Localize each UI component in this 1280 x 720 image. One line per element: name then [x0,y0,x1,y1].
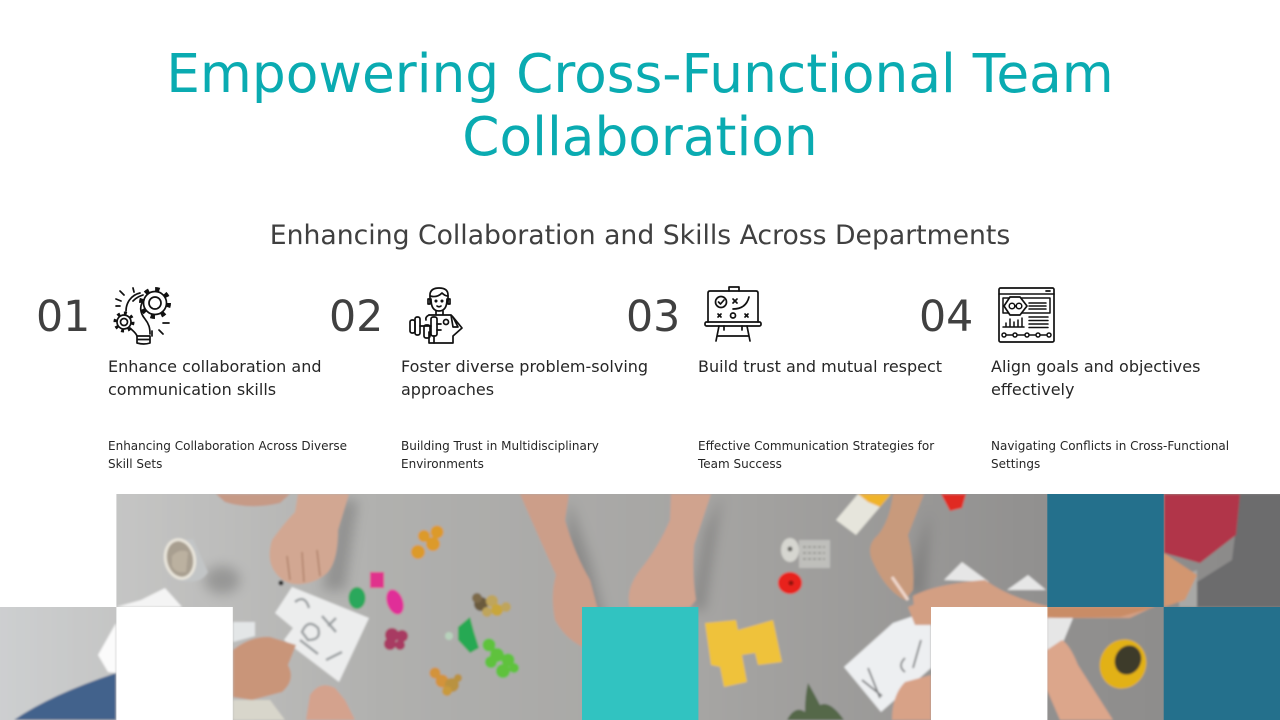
step 01 heading: communication skills [108,380,276,399]
icon: analytics dashboard window [998,287,1055,343]
step 03 description [698,439,934,471]
blocks: lower orange [430,668,462,696]
top-left hand [270,494,349,584]
step 02 heading [401,357,648,399]
photo content [0,484,1280,720]
bottom-left: notebook and sleeve [116,588,182,607]
step 03 heading: Build trust and mutual respect [698,357,942,376]
yellow card [705,620,782,687]
shadows [204,494,930,640]
step 01 description: Enhancing Collaboration Across Diverse [108,439,347,453]
horizontal arm [913,580,1155,625]
step 02 number: 02 [329,292,383,342]
step 02 description: Environments [401,457,484,471]
right arm and hand [870,494,924,600]
icon: lightbulb with gears [114,287,171,345]
step 02 heading: approaches [401,380,494,399]
stationery top right [836,494,891,535]
step 01 description: Skill Sets [108,457,162,471]
subtitle: Enhancing Collaboration and Skills Across Departments [270,220,1010,251]
blocks: orange cluster [411,526,444,559]
step 03 number: 03 [626,292,680,342]
title: Empowering Cross-Functional Team [166,42,1114,105]
step 02 description: Building Trust in Multidisciplinary [401,439,599,453]
centre arm two [629,494,711,607]
step 04 heading: Align goals and objectives [991,357,1200,376]
step 04 description: Settings [991,457,1040,471]
step 02 heading: Foster diverse problem-solving [401,357,648,376]
step 04 heading: effectively [991,380,1074,399]
step 02 description [401,439,599,471]
bottom hand with pen [233,622,255,642]
step 04 description [991,439,1229,471]
blocks: brown cluster [472,593,511,617]
sketch paper [275,587,369,682]
top-left arm [216,494,290,506]
step 04 number: 04 [919,292,973,342]
step 01 number: 01 [36,292,90,342]
red sleeve area [1197,494,1280,607]
centre arm one [520,494,598,648]
white papers bottom [844,610,931,712]
step 04 description: Navigating Conflicts in Cross-Functional [991,439,1229,453]
step 03 description: Team Success [698,457,782,471]
cup [178,539,208,582]
step 04 heading [991,357,1200,399]
icon: strategy whiteboard [704,286,762,342]
photo mosaic: team working at a table [0,494,1280,720]
step 03 description: Effective Communication Strategies for [698,439,934,453]
blocks: pink and green [370,572,384,588]
title [166,42,1114,168]
icon: person lifting dumbbell [409,287,463,344]
step 01 heading [108,357,322,399]
title: Collaboration [462,105,818,168]
bottom right paper, hand and yellow cup [1047,607,1155,618]
blocks: green [458,617,479,653]
white and colour tiles [0,494,116,607]
plant [787,683,844,720]
step 01 description [108,439,347,471]
paper triangles [944,562,1046,590]
step 01 heading: Enhance collaboration and [108,357,322,376]
